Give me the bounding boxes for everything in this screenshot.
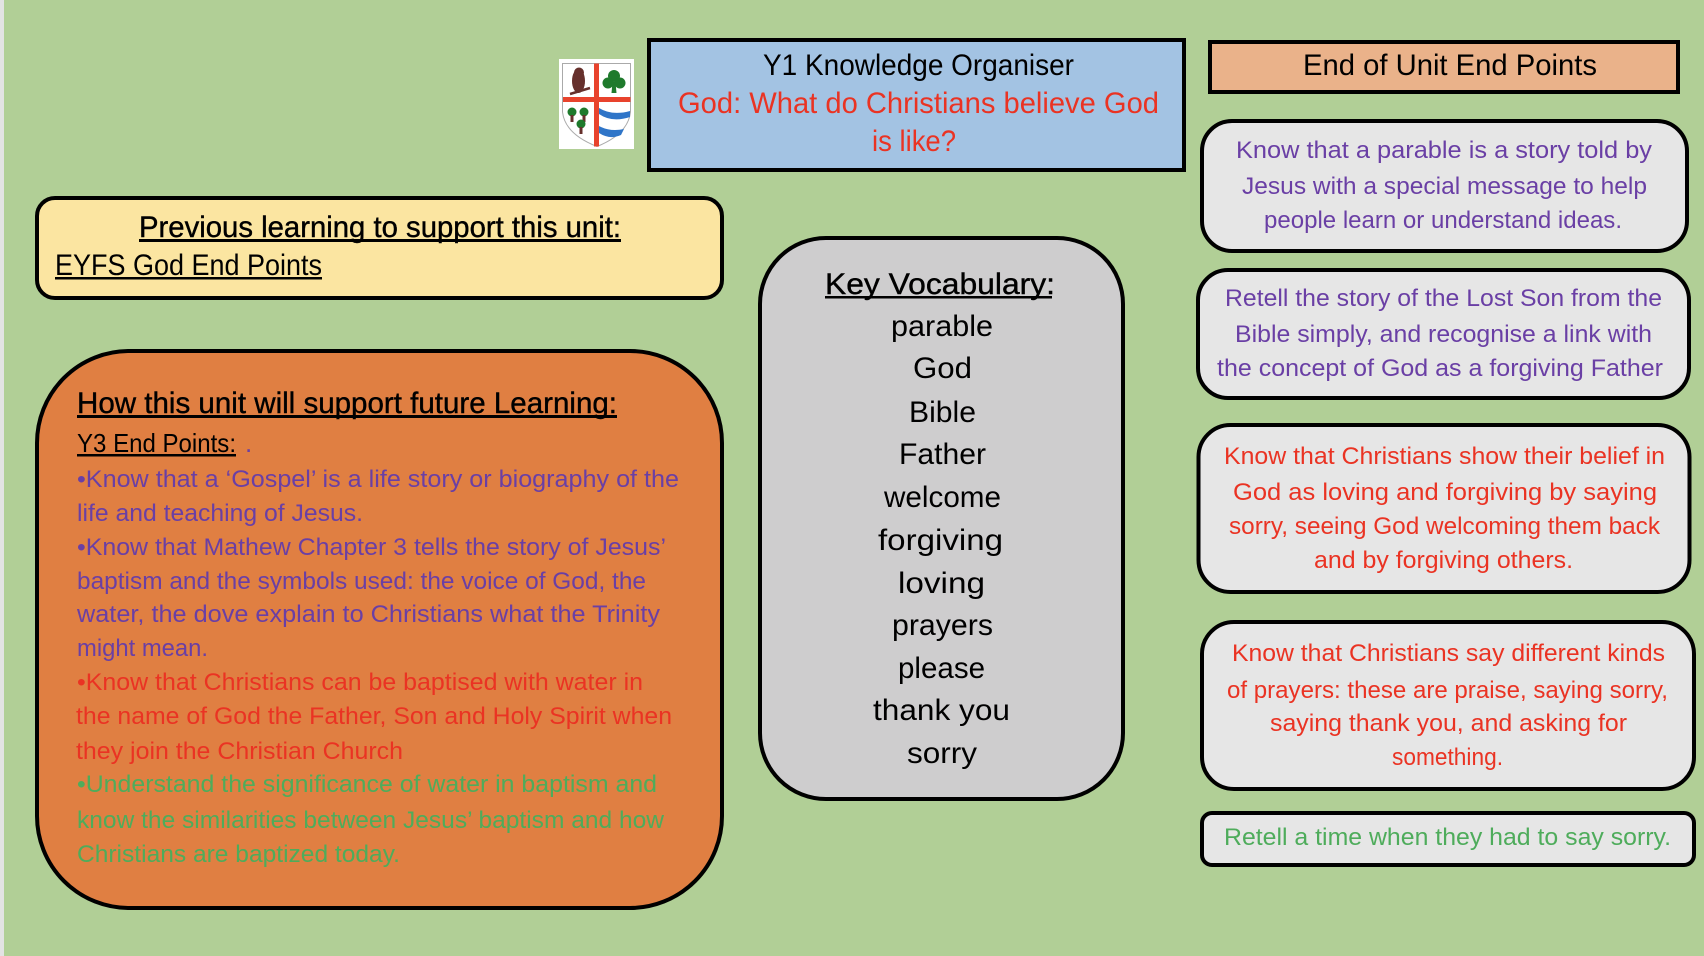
vocabulary list: Father: [899, 438, 986, 471]
card: parable end point: people learn or understand ideas.: [1264, 207, 1622, 234]
card: belief end point: and by forgiving others.: [1314, 547, 1573, 574]
card: saying sorry end point: [1202, 813, 1694, 865]
title line: Y1 Knowledge Organiser: [763, 49, 1074, 82]
subheading: Y3 end points: Y3 End Points:: [77, 428, 236, 458]
text: purple end points: •Know that Mathew Chapter 3 tells the story of Jesus’: [77, 534, 666, 561]
vocabulary list: loving: [898, 567, 985, 600]
card: prayers end point: [1202, 622, 1694, 789]
vocabulary list: Bible: [909, 396, 976, 429]
panel: key vocabulary: [760, 238, 1123, 799]
text: red end points: the name of God the Father, Son and Holy Spirit when: [76, 703, 672, 730]
text: green end points: [77, 771, 665, 868]
text: purple end points: baptism and the symbols used: the voice of God, the: [77, 568, 646, 595]
subtitle: is like?: [872, 125, 956, 158]
vocabulary list: please: [898, 652, 985, 685]
heading: future learning: How this unit will support future Learning:: [77, 387, 617, 420]
card: lost son end point: [1198, 270, 1689, 398]
text: red end points: they join the Christian Church: [76, 738, 403, 765]
link: EYFS end points: EYFS God End Points: [55, 249, 322, 282]
panel: title: [649, 40, 1184, 170]
card: parable end point: Know that a parable is a story told by: [1236, 137, 1652, 164]
panel: end of unit header: End of Unit End Points: [1303, 49, 1597, 82]
text: green end points: know the similarities between Jesus’ baptism and how: [77, 807, 665, 834]
card: lost son end point: Bible simply, and recognise a link with: [1235, 321, 1652, 348]
text: purple end points: might mean.: [77, 635, 208, 662]
card: prayers end point: of prayers: these are praise, saying sorry,: [1227, 677, 1668, 704]
subheading: Y3 end points: .: [245, 428, 252, 458]
card: belief end point: Know that Christians show their belief in: [1224, 443, 1665, 470]
vocabulary list: welcome: [883, 481, 1001, 514]
card: lost son end point: the concept of God as a forgiving Father: [1217, 355, 1663, 382]
card: belief end point: sorry, seeing God welcoming them back: [1229, 513, 1661, 540]
vocabulary list: forgiving: [878, 524, 1003, 557]
text: green end points: Christians are baptized today.: [77, 841, 400, 868]
panel: end of unit header: [1210, 42, 1678, 92]
subtitle: God: What do Christians believe God: [678, 87, 1159, 120]
text: purple end points: •Know that a ‘Gospel’ is a life story or biography of the: [77, 466, 679, 493]
vocabulary list: sorry: [907, 737, 977, 770]
heading: previous learning: Previous learning to support this unit:: [139, 211, 621, 244]
text: purple end points: life and teaching of Jesus.: [77, 500, 363, 527]
subtitle: [678, 87, 1159, 158]
text: purple end points: [76, 466, 679, 662]
card: saying sorry end point: Retell a time when they had to say sorry.: [1224, 824, 1671, 851]
card: prayers end point: saying thank you, and asking for: [1270, 710, 1627, 737]
text: purple end points: water, the dove explain to Christians what the Trinity: [76, 601, 660, 628]
text: red end points: [76, 669, 672, 765]
text: red end points: •Know that Christians can be baptised with water in: [77, 669, 643, 696]
vocabulary list: [873, 310, 1010, 770]
vocabulary list: thank you: [873, 694, 1010, 727]
card: lost son end point: Retell the story of the Lost Son from the: [1225, 285, 1662, 312]
vocabulary list: parable: [891, 310, 993, 343]
icon: school crest: [559, 59, 634, 149]
text: green end points: •Understand the significance of water in baptism and: [77, 771, 657, 798]
card: parable end point: Jesus with a special message to help: [1242, 173, 1647, 200]
panel: future learning: [37, 351, 722, 908]
card: prayers end point: Know that Christians say different kinds: [1232, 640, 1665, 667]
card: parable end point: [1202, 121, 1687, 251]
vocabulary list: prayers: [892, 609, 993, 642]
card: prayers end point: something.: [1392, 744, 1503, 771]
heading: key vocabulary: Key Vocabulary:: [825, 268, 1055, 301]
card: belief end point: God as loving and forgiving by saying: [1233, 479, 1657, 506]
vocabulary list: God: [913, 352, 972, 385]
panel: previous learning: [37, 198, 722, 298]
card: belief end point: [1198, 425, 1690, 592]
